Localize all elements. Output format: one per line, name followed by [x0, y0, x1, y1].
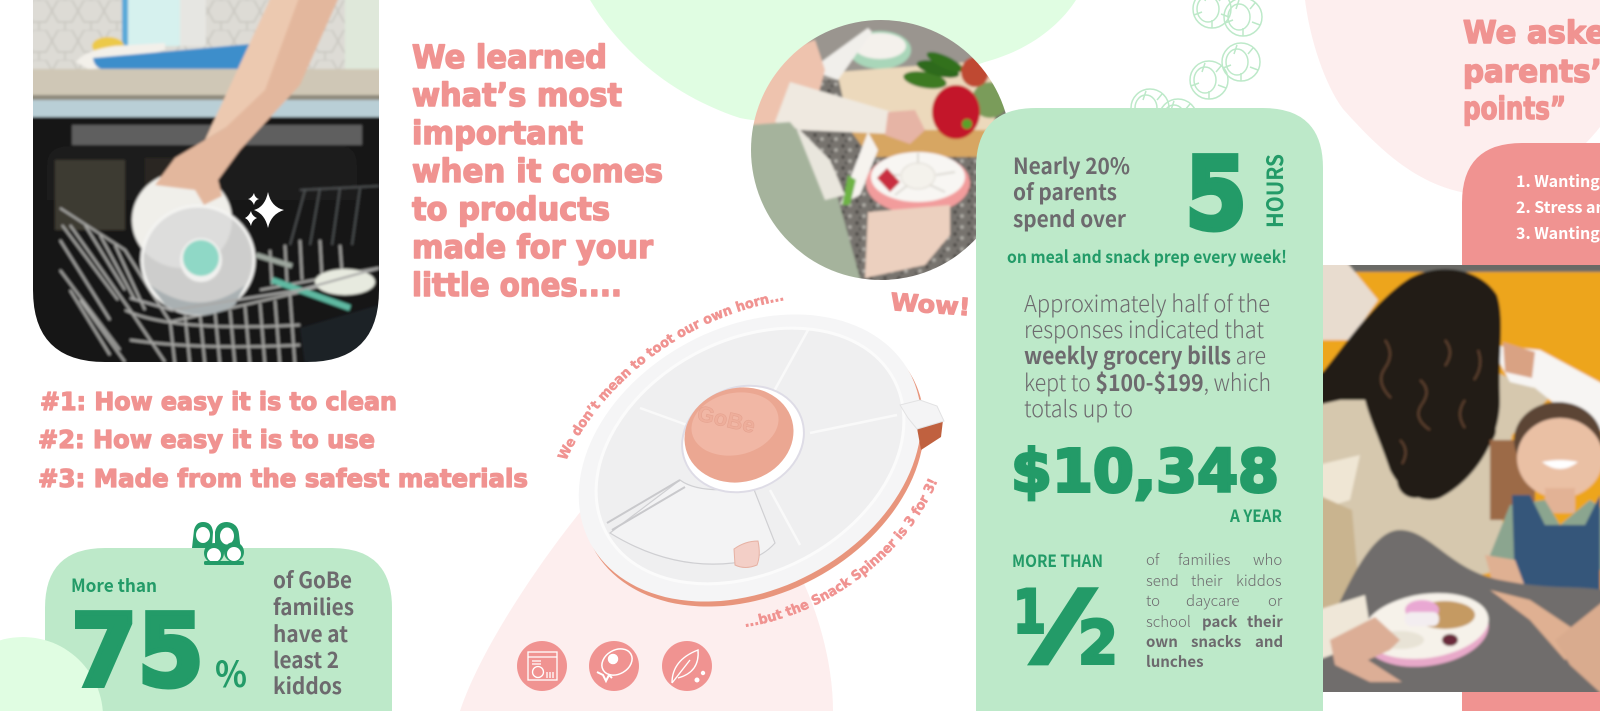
heading: we asked: points”	[1463, 91, 1566, 127]
curved text: toot our own horn: We don’t mean to toot our own horn...	[556, 296, 784, 459]
latch	[734, 541, 759, 568]
families paragraph: and	[1255, 631, 1283, 652]
heading: we learned	[412, 38, 663, 304]
more than label: More than	[71, 572, 157, 598]
families text: of GoBe	[273, 563, 352, 595]
big stat one half: 2	[1078, 608, 1118, 678]
nearly 20 percent text	[1013, 149, 1130, 234]
heading: we learned: when it comes	[412, 152, 663, 190]
ranked list: #2: How easy it is to use	[38, 425, 375, 454]
heading: we learned: what’s most	[412, 76, 622, 114]
photo: dishwasher	[30, 0, 382, 367]
families paragraph: or	[1268, 590, 1283, 611]
heading: we learned: to products	[412, 190, 610, 228]
photo: mother and child	[1318, 260, 1600, 697]
icon: family	[192, 522, 244, 565]
nearly 20 percent text: spend over	[1013, 202, 1126, 234]
families paragraph: send	[1146, 570, 1179, 591]
grocery paragraph: kept to $100-$199, which	[1024, 364, 1271, 398]
icons: snack spinner outlines	[1131, 0, 1262, 137]
grocery paragraph: totals up to	[1024, 390, 1133, 424]
nearly 20 percent text: of parents	[1013, 175, 1117, 207]
panel: prep and grocery stats	[976, 108, 1323, 711]
families paragraph: school	[1146, 611, 1191, 632]
background blob: top right pink	[1305, 0, 1600, 195]
logo on button: GoBe	[695, 401, 758, 438]
icon: dishwasher safe	[517, 641, 567, 691]
families paragraph: kiddos	[1236, 570, 1282, 591]
grocery paragraph: responses indicated that	[1024, 311, 1264, 345]
pain point list	[1516, 168, 1600, 244]
big stat 5: 5	[1185, 136, 1247, 252]
grocery paragraph: Approximately half of the	[1024, 285, 1270, 319]
a year label: A YEAR	[1229, 502, 1282, 527]
icon: snack spinner fun	[589, 641, 639, 691]
more than label: MORE THAN	[1012, 547, 1103, 572]
families text: have at	[273, 617, 348, 649]
families paragraph: families	[1178, 549, 1231, 570]
panel: 75% families	[0, 548, 392, 711]
heading: we learned: We learned	[412, 38, 607, 76]
ranked list: #3: Made from the safest materials	[38, 464, 528, 493]
corner blob	[0, 637, 103, 711]
families text: least 2	[273, 643, 339, 675]
hours label: HOURS	[1258, 154, 1290, 228]
grocery paragraph	[1024, 285, 1271, 424]
families paragraph: who	[1253, 549, 1282, 570]
families paragraph: snacks	[1191, 631, 1241, 652]
curved text: 3 for 3: ...but the Snack Spinner is 3 for 3!	[746, 478, 938, 627]
families paragraph: daycare	[1186, 590, 1239, 611]
families paragraph: to	[1146, 590, 1160, 611]
ranked list	[38, 387, 528, 493]
families text: families	[273, 590, 354, 622]
heading: we learned: important	[412, 114, 583, 152]
hinge tab	[917, 420, 943, 450]
background blob: bottom pink	[460, 483, 833, 711]
big stat one half: 1	[1013, 578, 1046, 648]
families paragraph: lunches	[1146, 651, 1204, 672]
panel: pain points	[1462, 143, 1600, 265]
pink strip below photo	[1462, 692, 1600, 711]
background blob: top green	[590, 0, 1076, 121]
prep caption: on meal and snack prep every week!	[1007, 243, 1287, 268]
wow callout: Wow!	[890, 288, 971, 322]
product: snack spinner	[529, 257, 974, 664]
families paragraph: their	[1191, 570, 1223, 591]
families paragraph: pack	[1202, 611, 1237, 632]
icon: sparkles	[245, 192, 284, 228]
families paragraph	[1146, 549, 1283, 672]
photo: kitchen prep circle	[751, 20, 1006, 280]
nearly 20 percent text: Nearly 20%	[1013, 149, 1130, 181]
icon: safe materials leaf	[662, 641, 712, 691]
percent sign: %	[215, 646, 247, 698]
heading: we learned: made for your	[412, 228, 653, 266]
ranked list: #1: How easy it is to clean	[40, 387, 397, 416]
heading: we asked	[1463, 15, 1600, 127]
families text	[273, 563, 354, 701]
heading: we learned: little ones....	[412, 266, 622, 304]
families paragraph: of	[1146, 549, 1160, 570]
big stat 75: 75	[71, 592, 204, 710]
big stat 10,348: $10,348	[1011, 436, 1279, 506]
big stat one half	[1013, 570, 1118, 680]
big stat one half: /	[1027, 570, 1100, 680]
families text: kiddos	[273, 669, 342, 701]
grocery paragraph: weekly grocery bills are	[1024, 337, 1266, 371]
families paragraph: own	[1146, 631, 1178, 652]
families paragraph: their	[1247, 611, 1283, 632]
